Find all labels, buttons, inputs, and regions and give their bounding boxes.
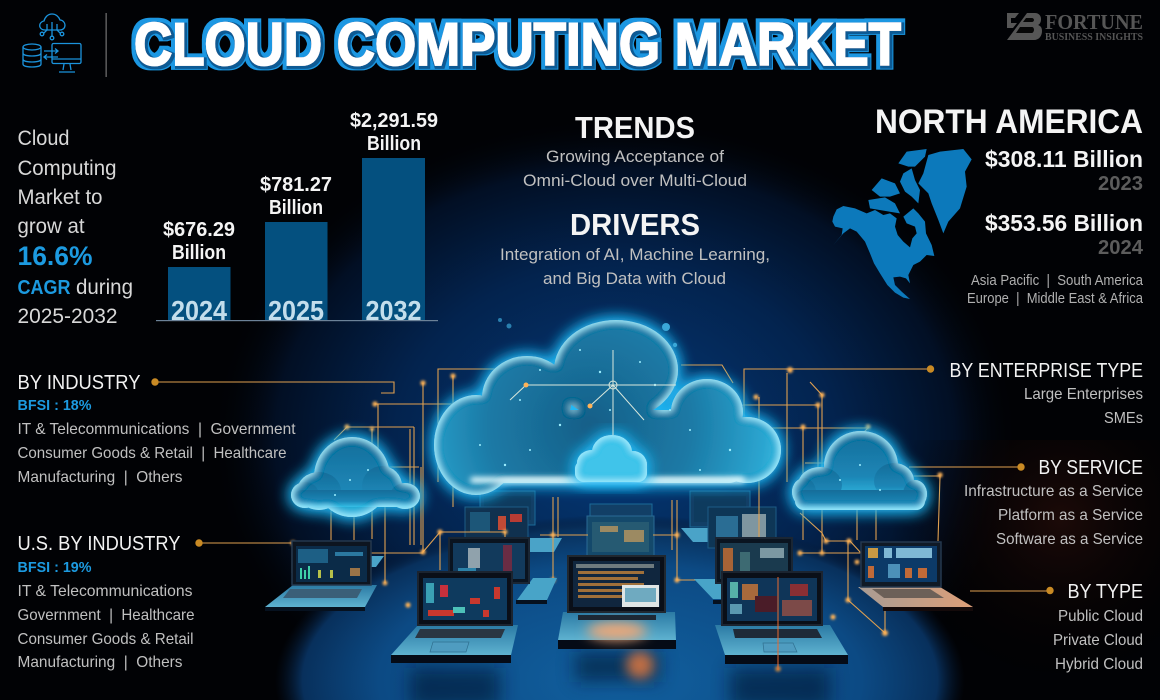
text: trends: TRENDS (575, 110, 695, 145)
callout: by enterprise type: SMEs (1104, 410, 1143, 427)
callout: by industry: BY INDUSTRY (18, 372, 140, 394)
front right laptop (715, 572, 848, 664)
text: CAGR statement: grow at (18, 215, 85, 238)
far left laptop (265, 541, 377, 611)
text: CAGR statement: during (76, 276, 133, 299)
illustration: laptops on floor with clouds (155, 318, 1050, 700)
callout: by industry: Consumer Goods & Retail | Healthcare (18, 445, 287, 462)
text: CAGR statement (18, 127, 133, 328)
bar 2024: $676.29 (163, 219, 235, 241)
callout: by service: BY SERVICE (1038, 457, 1143, 479)
callout: U.S. by industry: U.S. BY INDUSTRY (18, 533, 180, 555)
middle row laptops (449, 538, 792, 604)
callout: by type (1046, 581, 1143, 673)
text: drivers: DRIVERS (570, 207, 700, 242)
callout: by service (964, 457, 1143, 548)
bar chart: market size (156, 110, 438, 326)
text: North America stats: Asia Pacific | South America (971, 273, 1144, 289)
callout: by type: Public Cloud (1058, 608, 1143, 625)
callout: by type: BY TYPE (1068, 581, 1143, 603)
title: CLOUD COMPUTING MARKET (134, 11, 901, 78)
center cloud (434, 320, 781, 495)
text: North America stats: NORTH AMERICA (875, 103, 1143, 141)
text: North America stats (875, 103, 1144, 307)
bar 2025 (260, 174, 332, 326)
callout: by type: Private Cloud (1053, 632, 1143, 649)
right cloud (792, 431, 927, 510)
callout: by service: Platform as a Service (998, 507, 1143, 524)
text: drivers (500, 207, 770, 288)
icon: cloud, database and monitor (23, 14, 81, 72)
bar 2025: $781.27 (260, 174, 332, 196)
text: drivers: Integration of AI, Machine Learning, (500, 245, 770, 264)
far right laptop (858, 542, 973, 611)
text: North America stats: 2023 (1098, 173, 1143, 195)
text: North America stats: $353.56 Billion (985, 210, 1143, 236)
callout: by service: Software as a Service (996, 531, 1143, 548)
map: North America (832, 149, 972, 299)
front laptops (391, 556, 848, 700)
bar 2025: Billion (269, 197, 323, 219)
bar 2024 (163, 219, 235, 326)
logo: Fortune Business Insights: FORTUNE (1045, 10, 1143, 34)
text: trends: Omni-Cloud over Multi-Cloud (523, 171, 747, 190)
orange circuit lines (155, 365, 1050, 670)
cloud hub and connector lines (510, 350, 676, 435)
logo: Fortune Business Insights: BUSINESS INSIGHTS (1045, 32, 1143, 43)
cloud sparkle dots (334, 318, 881, 496)
text: North America stats: Europe | Middle East & Africa (967, 291, 1144, 307)
bar 2032 (350, 110, 438, 326)
callout: by service: Infrastructure as a Service (964, 483, 1143, 500)
callout: U.S. by industry: Consumer Goods & Retail (18, 631, 194, 648)
bar 2032: Billion (367, 133, 421, 155)
callout: by enterprise type (927, 360, 1143, 427)
text: CAGR statement: 2025-2032 (18, 305, 118, 328)
bar 2024: 2024 (171, 295, 227, 326)
callout: by industry: BFSI : 18% (18, 397, 92, 414)
small inner cloud (575, 435, 647, 482)
text: drivers: and Big Data with Cloud (543, 269, 726, 288)
bar 2025: 2025 (268, 295, 324, 326)
callout: U.S. by industry: BFSI : 19% (18, 559, 92, 576)
callout: U.S. by industry (18, 533, 203, 671)
rear laptops (360, 491, 776, 567)
text: trends: Growing Acceptance of (546, 147, 724, 166)
callout: U.S. by industry: Government | Healthcare (18, 607, 195, 624)
bar 2032: 2032 (366, 295, 422, 326)
orange junction dots (290, 367, 943, 672)
text: CAGR statement: Market to (18, 186, 102, 209)
callout: U.S. by industry: IT & Telecommunications (18, 583, 192, 600)
cloud bottom glow (470, 477, 745, 483)
text: North America stats: $308.11 Billion (985, 146, 1143, 172)
callout: by industry: Manufacturing | Others (18, 469, 182, 486)
text: CAGR statement: 16.6% (18, 241, 92, 271)
bar 2032: $2,291.59 (350, 110, 438, 132)
text: North America stats: 2024 (1098, 237, 1144, 259)
center laptop (558, 556, 676, 679)
left cloud (291, 437, 420, 517)
callout: by industry (18, 372, 296, 486)
callout: by industry: IT & Telecommunications | Government (18, 421, 296, 438)
text: CAGR statement: Cloud (18, 127, 70, 150)
front left laptop (391, 572, 518, 663)
text: CAGR statement: Computing (18, 157, 116, 180)
divider (106, 13, 107, 77)
callout: U.S. by industry: Manufacturing | Others (18, 654, 182, 671)
callout: by enterprise type: Large Enterprises (1024, 386, 1143, 403)
callout: by type: Hybrid Cloud (1055, 656, 1143, 673)
bar 2024: Billion (172, 242, 226, 264)
text: trends (523, 110, 747, 190)
front laptop reflections (410, 652, 830, 700)
logo: Fortune Business Insights (1007, 10, 1143, 43)
text: CAGR statement: CAGR (18, 277, 71, 299)
